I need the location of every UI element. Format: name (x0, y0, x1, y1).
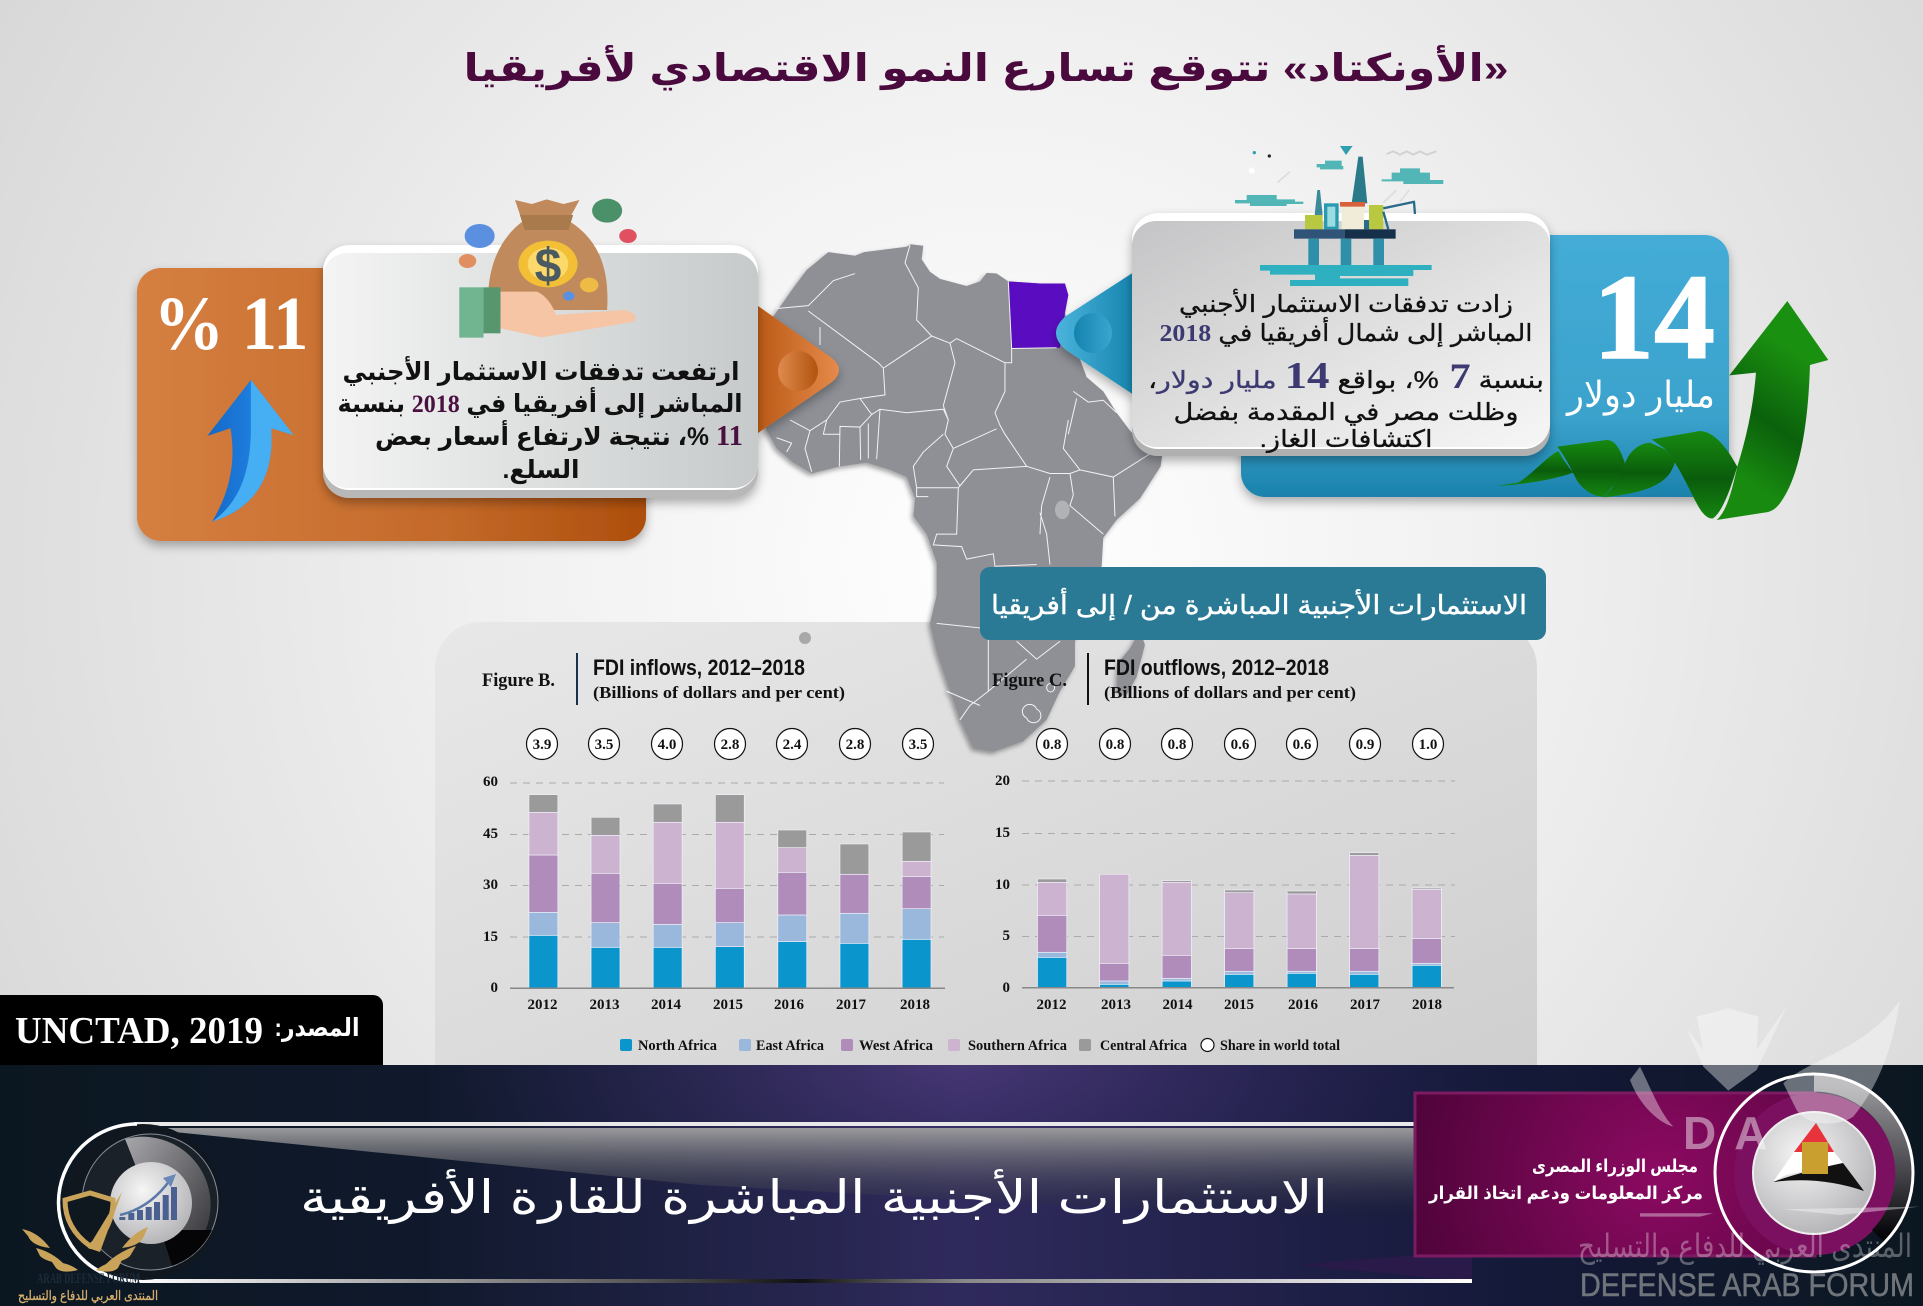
chart C share circles: 0.6 (1293, 737, 1312, 753)
chart C axis labels and grid: 0 (1002, 980, 1010, 996)
source value: UNCTAD, 2019 (15, 1010, 263, 1052)
chart C year labels: 2014 (1162, 997, 1193, 1013)
footer title text: الاستثمارات الأجنبية المباشرة للقارة الأفريقية (300, 1168, 1328, 1225)
chart B stacked bars (529, 795, 931, 988)
map: Madagascar (1117, 631, 1145, 695)
map: Lake Victoria (1055, 501, 1070, 519)
chart C header: (Billions of dollars and per cent) (1104, 683, 1356, 702)
chart B axis labels and grid: 30 (483, 877, 498, 893)
footer background (0, 1065, 1923, 1306)
medallion black sector (160, 1230, 212, 1266)
chart C header: Figure C. (992, 670, 1067, 691)
chart B year labels: 2012 (528, 997, 558, 1013)
chart B axis labels and grid: 0 (490, 980, 498, 996)
chart C year labels: 2018 (1412, 997, 1442, 1013)
chart B year labels: 2016 (774, 997, 804, 1013)
medallion grey sector (125, 1137, 211, 1266)
chart C share circles: 0.8 (1106, 737, 1124, 753)
watermark: gold forum logo left (18, 1192, 158, 1304)
text: left card paragraph: ارتفعت تدفقات الاستثمار الأجنبي (342, 356, 740, 386)
chart B share circles: 2.8 (721, 737, 739, 753)
chart B year labels: 2018 (900, 997, 930, 1013)
chart: FDI inflows (482, 653, 945, 1013)
decorative dot on panel (799, 632, 811, 644)
blue panel body (1241, 235, 1729, 497)
magenta box (1415, 1093, 1815, 1256)
heading banner: FDI from and to Africa (980, 567, 1546, 640)
text: cabinet name (1428, 1156, 1703, 1204)
chart C share circles: 1.0 (1419, 737, 1437, 753)
panel: orange 11 percent (137, 268, 839, 541)
chart B share circles (526, 728, 934, 760)
icon: money bag in hand (459, 199, 637, 338)
banner body (980, 567, 1546, 640)
orange panel body (137, 268, 646, 541)
chart B axis labels and grid (483, 774, 944, 996)
chart: FDI outflows (992, 653, 1455, 1013)
watermark: defense arab forum right (1578, 1000, 1920, 1265)
chart B share circles: 2.8 (846, 737, 864, 753)
text: cabinet name: مركز المعلومات ودعم اتخاذ القرار (1428, 1183, 1703, 1204)
text: right card paragraph: بنسبة 7 %، بواقع 14 مليار دولار، (1148, 355, 1544, 397)
big number 11 percent: % 11 (154, 282, 308, 366)
text: left card paragraph: 11 %، نتيجة لارتفاع أسعار بعض (375, 420, 743, 452)
chart B year labels: 2017 (836, 997, 866, 1013)
chart C year labels (1036, 997, 1442, 1013)
chart B header: (Billions of dollars and per cent) (593, 683, 845, 702)
source box (0, 995, 383, 1065)
icon: Egyptian flag triangle (1773, 1123, 1864, 1191)
icon: dollar sign: $ (535, 240, 562, 293)
map: country borders (777, 245, 1152, 723)
unit: billion dollars: مليار دولار (1565, 374, 1715, 416)
chart C header: FDI outflows, 2012–2018 (1104, 655, 1329, 680)
chart C year labels: 2017 (1350, 997, 1380, 1013)
box: cabinet information center (1415, 1074, 1913, 1272)
orange pointer (758, 306, 839, 433)
chart B year labels: 2013 (590, 997, 620, 1013)
icon: green ribbon arrow (1497, 301, 1828, 520)
legend: North Africa (638, 1038, 717, 1054)
chart C year labels: 2015 (1224, 997, 1254, 1013)
chart B axis labels and grid: 15 (483, 929, 498, 945)
watermark: gold forum logo left: المنتدى العربي للدفاع والتسليح (18, 1288, 158, 1304)
medallion base (65, 1124, 221, 1280)
chart C axis labels and grid: 10 (995, 877, 1010, 893)
card: left text (323, 199, 758, 498)
chart C share circles: 0.8 (1043, 737, 1061, 753)
source label: المصدر: (274, 1014, 360, 1042)
map: Egypt highlighted (1008, 281, 1068, 349)
title: «الأونكتاد» تتوقع تسارع النمو الاقتصادي لأفريقيا (464, 44, 1508, 91)
chart C header (992, 653, 1356, 705)
map: continent shape (758, 244, 1163, 752)
panel: chart background (435, 622, 1537, 1065)
dark ring segment (1814, 1083, 1904, 1236)
chart B axis labels and grid: 60 (483, 774, 498, 790)
chart C year labels: 2016 (1288, 997, 1318, 1013)
footer band (0, 1065, 1923, 1306)
chart B share circles: 2.4 (783, 737, 802, 753)
chart C axis labels and grid (995, 773, 1455, 996)
source background (0, 995, 383, 1065)
panel: blue 14 billion (1056, 235, 1828, 520)
watermark letters: DA (1683, 1107, 1785, 1159)
legend: Share in world total (1220, 1038, 1340, 1054)
chart B share circles: 3.5 (595, 737, 613, 753)
chart C axis labels and grid: 20 (995, 773, 1010, 789)
pointer hole (778, 351, 818, 391)
pointer hole (1074, 313, 1112, 353)
blue pointer (1056, 272, 1134, 395)
chart B share circles: 4.0 (658, 737, 676, 753)
footer title ribbon (134, 1122, 1472, 1283)
chart B year labels: 2014 (651, 997, 682, 1013)
text: left card paragraph: المباشر إلى أفريقيا في 2018 بنسبة (338, 387, 742, 419)
banner text: الاستثمارات الأجنبية المباشرة من / إلى أفريقيا (991, 587, 1527, 621)
chart B axis labels and grid: 45 (483, 826, 498, 842)
chart B header: Figure B. (482, 670, 555, 691)
legend: East Africa (756, 1038, 824, 1054)
white ring (1715, 1074, 1913, 1272)
chart C axis labels and grid: 5 (1002, 928, 1010, 944)
legend: Southern Africa (968, 1038, 1067, 1054)
chart B year labels (528, 997, 930, 1013)
big number 14: 14 (1593, 250, 1715, 385)
chart B share circles: 3.9 (533, 737, 551, 753)
legend: West Africa (859, 1038, 933, 1054)
icon: growth chart medallion (58, 1124, 221, 1281)
text: right card paragraph: اكتشافات الغاز. (1260, 426, 1432, 453)
chart B header: FDI inflows, 2012–2018 (593, 655, 805, 680)
chart C share circles: 0.6 (1231, 737, 1250, 753)
chart C year labels: 2012 (1036, 997, 1066, 1013)
chart B baseline (510, 988, 945, 989)
chart B share circles: 3.5 (909, 737, 927, 753)
watermark shield and wings (1630, 1000, 1920, 1217)
chart C baseline (1022, 987, 1454, 988)
text: cabinet name: مجلس الوزراء المصرى (1532, 1156, 1698, 1177)
text: right card paragraph: وظلت مصر في المقدمة بفضل (1174, 399, 1518, 426)
chart C stacked bars (1037, 853, 1441, 988)
legend: Central Africa (1100, 1038, 1187, 1054)
chart C share circles: 0.9 (1356, 737, 1374, 753)
map of Africa (758, 244, 1163, 752)
text: left card paragraph (338, 356, 743, 485)
text: right card paragraph (1148, 289, 1544, 453)
chart C year labels: 2013 (1101, 997, 1131, 1013)
text: right card paragraph: زادت تدفقات الاستثمار الأجنبي (1179, 289, 1513, 318)
text: left card paragraph: السلع. (502, 456, 580, 485)
icon: offshore oil rig (1235, 146, 1443, 286)
right card body (1132, 213, 1550, 456)
chart B header (482, 653, 845, 705)
card: right text (1132, 146, 1550, 456)
text: right card paragraph: المباشر إلى شمال أفريقيا في 2018 (1160, 317, 1532, 348)
watermark: gold forum logo left: ARAB DEFENSE FORUM (37, 1271, 140, 1287)
chart C share circles: 0.8 (1168, 737, 1186, 753)
legend (620, 1038, 1340, 1054)
left card body (323, 245, 758, 498)
icon: blue up arrow (207, 380, 294, 522)
chart C share circles (1036, 728, 1444, 760)
medallion white arc (58, 1124, 137, 1281)
chart C axis labels and grid: 15 (995, 825, 1010, 841)
chart B year labels: 2015 (713, 997, 743, 1013)
